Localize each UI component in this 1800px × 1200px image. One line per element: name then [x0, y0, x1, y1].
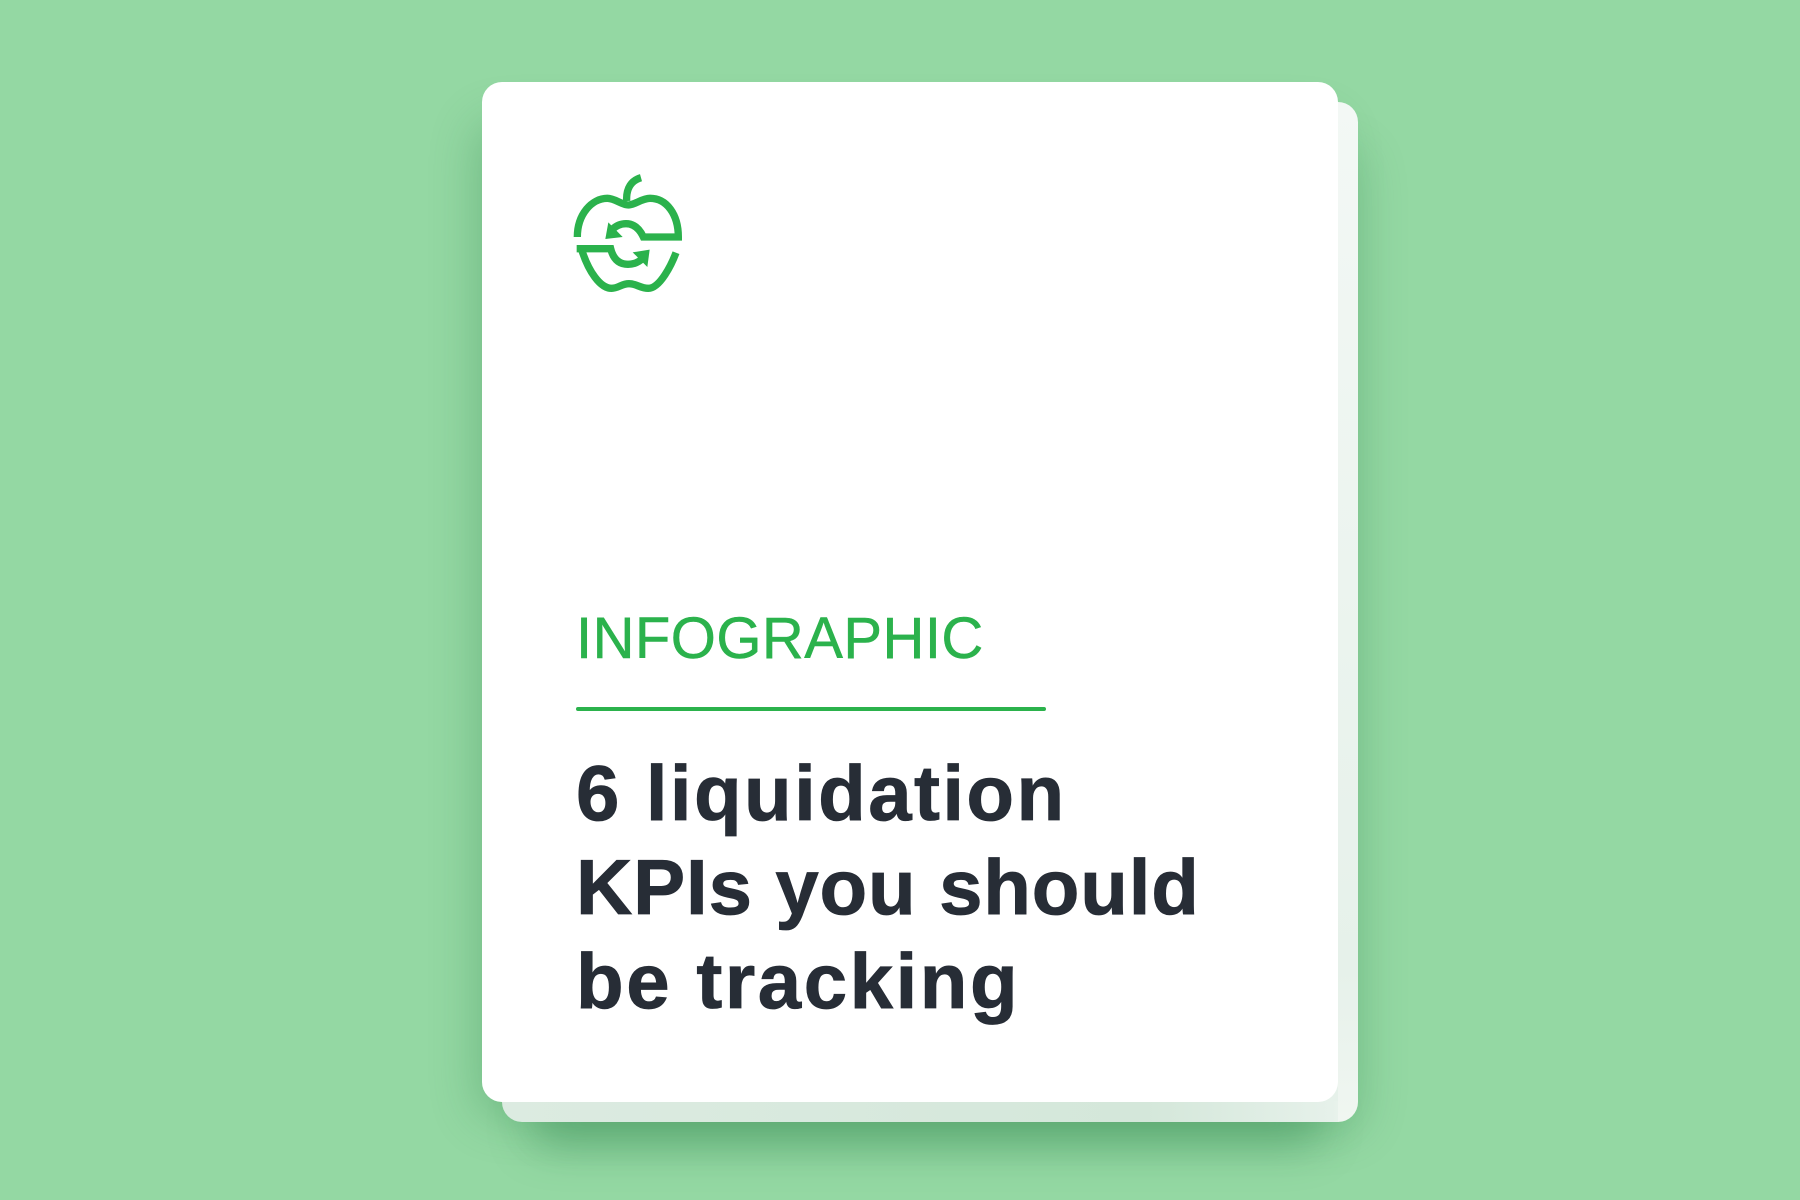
label: infographic: INFOGRAPHIC	[576, 606, 984, 671]
panel: front card	[482, 82, 1338, 1102]
shadow behind front sheet	[482, 110, 1338, 1102]
shadow under sheets	[530, 1080, 1320, 1120]
icon: apple with recycling arrows	[574, 174, 682, 292]
panel: back sheet	[502, 102, 1358, 1122]
title	[576, 749, 1200, 1025]
title: 6 liquidation	[576, 749, 1067, 837]
title: KPIs you should	[576, 843, 1200, 931]
title: be tracking	[576, 937, 1020, 1025]
shadow behind back sheet	[530, 140, 1358, 1122]
